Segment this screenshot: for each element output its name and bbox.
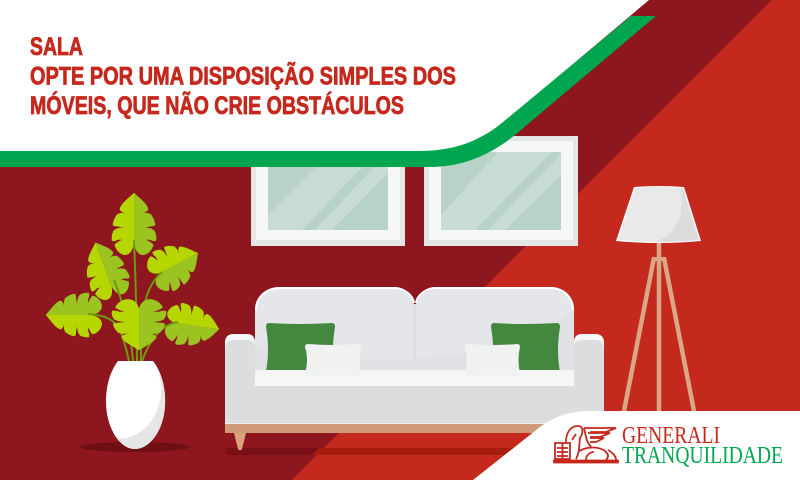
sofa: backrest shading [255, 310, 574, 375]
vase [106, 361, 165, 449]
plant leaves: outer [46, 193, 222, 350]
lamp [616, 186, 701, 411]
header: green swoosh band [0, 16, 656, 167]
emblem: base bar [554, 460, 618, 462]
header: white panel [0, 0, 649, 152]
sofa: backrest highlight [256, 288, 573, 310]
emblem: lion head and body [566, 426, 616, 460]
sofa: base [225, 386, 604, 424]
plant leaf: center [112, 299, 166, 350]
title text: OPTE POR UMA DISPOSIÇÃO SIMPLES DOS [30, 60, 456, 90]
logo: wordmark: GENERALI [622, 423, 720, 449]
title text [30, 33, 456, 120]
pillow: white right [465, 344, 520, 376]
pillow: green right [491, 323, 560, 375]
logo: winged lion emblem [554, 426, 618, 462]
title text: MÓVEIS, QUE NÃO CRIE OBSTÁCULOS [30, 90, 404, 120]
logo: wordmark [622, 423, 783, 469]
sofa: backrest right [416, 287, 574, 375]
sofa [225, 287, 604, 450]
window: left [251, 130, 405, 246]
emblem: wing [584, 428, 616, 448]
pillow: green left [266, 323, 335, 375]
lamp: pole and tripod legs [624, 241, 694, 411]
lamp: shade [616, 186, 701, 243]
sofa: right arm [574, 334, 604, 386]
sofa: bottom edge highlight [225, 423, 604, 424]
sofa: backrest seam [414, 304, 416, 375]
floor shadow: sofa [226, 448, 520, 455]
background: bright red diagonal [292, 0, 800, 480]
sofa: seat cushion [255, 370, 574, 386]
floor shadow: vase [80, 442, 190, 452]
logo: white corner panel [473, 411, 800, 480]
sofa: backrest left [255, 287, 414, 375]
window: right [424, 136, 578, 246]
pillow: white left [305, 344, 361, 376]
plant stems [88, 240, 178, 361]
emblem: book [555, 443, 570, 459]
sofa: arm highlights [225, 334, 604, 348]
sofa: wooden base and leg [225, 424, 604, 450]
sofa: left arm [225, 334, 255, 386]
title text: SALA [30, 33, 83, 61]
